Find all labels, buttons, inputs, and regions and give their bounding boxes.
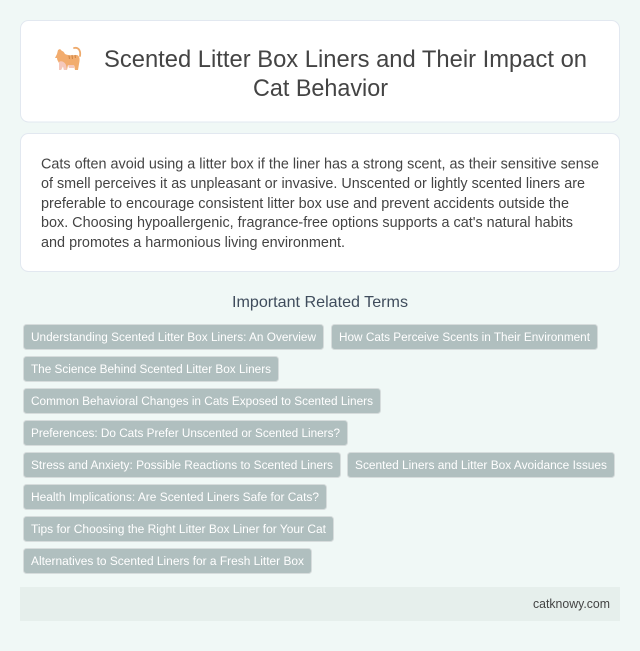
tag 10 (24, 548, 312, 574)
tag 1: Understanding Scented Litter Box Liners: An Overview (31, 330, 316, 344)
text block: description: Cats often avoid using a litter box if the liner has a strong scent, as their sensitive sense (41, 156, 599, 172)
tag 5: Preferences: Do Cats Prefer Unscented or Scented Liners? (31, 426, 340, 440)
tag 10: Alternatives to Scented Liners for a Fresh Litter Box (31, 554, 304, 568)
tag 7: Scented Liners and Litter Box Avoidance Issues (355, 458, 607, 472)
title: Cat Behavior (253, 75, 388, 102)
tag 2: How Cats Perceive Scents in Their Environment (339, 330, 591, 344)
tag 2 (332, 324, 598, 350)
footer: catknowy.com (533, 597, 610, 611)
footer (20, 587, 620, 621)
tag 4: Common Behavioral Changes in Cats Exposed to Scented Liners (31, 394, 373, 408)
title (104, 46, 587, 102)
text block: description: of smell perceives it as unpleasant or invasive. Unscented or lightly scented liners are (41, 175, 585, 192)
icon: cat (55, 48, 80, 70)
heading: related terms: Important Related Terms (232, 294, 408, 311)
text block: description: preferable to encourage consistent litter box use and prevent accidents outside the (41, 195, 569, 212)
tag 9 (24, 516, 334, 542)
panel: description (20, 134, 620, 272)
tag 1 (24, 324, 324, 350)
text block: description (41, 156, 599, 251)
tag 8: Health Implications: Are Scented Liners Safe for Cats? (31, 490, 319, 504)
tag 3: The Science Behind Scented Litter Box Liners (31, 362, 271, 376)
tag 4 (24, 388, 380, 414)
panel: title card (20, 20, 620, 122)
tag 8 (24, 484, 326, 510)
title: Scented Litter Box Liners and Their Impact on (104, 46, 587, 73)
tag 3 (24, 356, 278, 382)
text block: description: and promotes a harmonious living environment. (41, 234, 345, 251)
text block: description: box. Choosing hypoallergenic, fragrance-free options supports a cat's natural habits (41, 214, 573, 231)
tag 9: Tips for Choosing the Right Litter Box Liner for Your Cat (31, 522, 327, 536)
tag 6: Stress and Anxiety: Possible Reactions to Scented Liners (31, 458, 333, 472)
tag 6 (24, 452, 340, 478)
tag 5 (24, 420, 348, 446)
tag 7 (348, 452, 614, 478)
tag list (24, 324, 614, 574)
